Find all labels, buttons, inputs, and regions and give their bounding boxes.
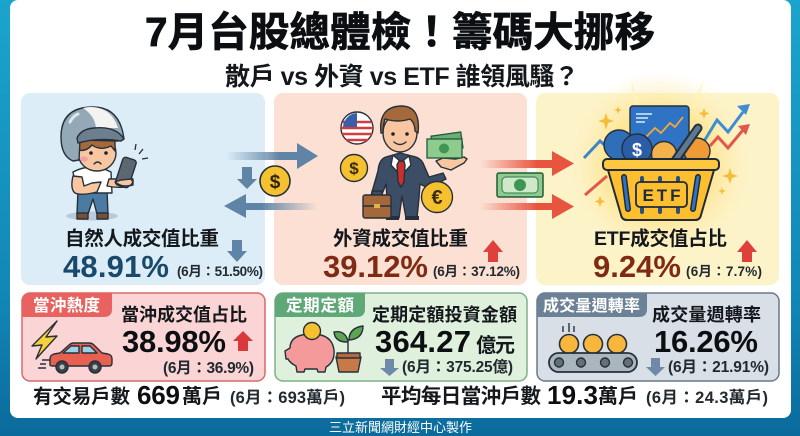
- unit: hundred million: 億元: [476, 334, 515, 357]
- arrow: foreign up: [483, 240, 503, 262]
- value: regular investment amount: 364.27: [375, 324, 471, 359]
- arrow: retail down: [227, 240, 247, 262]
- label: day trading share: 當沖成交值占比: [121, 304, 247, 325]
- panel: day trading: [22, 293, 265, 381]
- arrow: foreign to retail: [224, 194, 317, 218]
- arrow: regular investment down: [380, 359, 399, 376]
- tab: turnover: 成交量週轉率: [543, 296, 640, 315]
- panel: foreign investors: [274, 93, 527, 285]
- stat: trading accounts: 有交易戶數: [33, 385, 130, 408]
- icon: dollar coin: $: [349, 159, 359, 178]
- arrow: foreign to ETF upper: [480, 151, 574, 176]
- previous month: turnover: (6月：21.91%): [668, 359, 769, 376]
- panel: retail investors: [21, 93, 265, 285]
- arrow: ETF up: [737, 240, 757, 262]
- arrow: turnover down: [646, 358, 665, 376]
- label: ETF share: ETF成交值占比: [594, 227, 727, 250]
- arrow: foreign to ETF lower: [480, 194, 574, 219]
- value: foreign share: 39.12%: [323, 249, 428, 284]
- icon: piggy bank and plant: [285, 322, 363, 372]
- previous month: ETF: (6月：7.7%): [686, 264, 762, 279]
- label: turnover rate: 成交量週轉率: [652, 304, 761, 325]
- icon label: ETF: ETF: [642, 186, 680, 205]
- stat: average daily day-trading accounts: 19.3: [547, 380, 598, 410]
- tab: day trading heat: [22, 293, 112, 317]
- icon: dollar coin between panels: $: [270, 172, 281, 193]
- icon: US flag coin: [341, 112, 373, 144]
- stat: average daily day-trading accounts: 萬戶: [598, 385, 638, 408]
- icon: lightning and car: [32, 321, 112, 373]
- stat: trading accounts: [33, 380, 345, 410]
- icon: ETF basket: $: [632, 140, 642, 160]
- icon: euro coin: €: [431, 187, 443, 209]
- title: 7月台股總體檢！籌碼大挪移: [145, 9, 655, 55]
- arrow: retail to foreign: [226, 143, 318, 169]
- label: foreign share: 外資成交值比重: [333, 227, 468, 250]
- tab: day trading heat: 當沖熱度: [33, 296, 100, 315]
- panel: turnover: [537, 293, 779, 381]
- icon: briefcase: [363, 191, 391, 218]
- label: regular investment amount: 定期定額投資金額: [372, 304, 517, 325]
- previous month: regular investment: (6月：375.25億): [402, 358, 513, 376]
- previous month: foreign: (6月：37.12%): [433, 264, 520, 279]
- value: day trading share: 38.98%: [122, 324, 226, 359]
- previous month: retail: (6月：51.50%): [177, 264, 263, 279]
- stat: trading accounts: 669: [137, 380, 180, 410]
- arrow: small down: [237, 167, 257, 189]
- tab: regular investment: [275, 293, 365, 317]
- subtitle: 散戶 vs 外資 vs ETF 誰領風騷？: [225, 63, 579, 91]
- icon: worried rider with phone: [61, 107, 148, 220]
- icon: banknotes: [427, 132, 467, 170]
- icon: banknote between panels: [497, 173, 543, 197]
- footer credit: 三立新聞網財經中心製作: [329, 420, 472, 435]
- panel: regular investment: [275, 293, 527, 381]
- stat: trading accounts: (6月：693萬戶): [230, 388, 345, 407]
- stat: average daily day-trading accounts: (6月：24.3萬戶): [646, 388, 768, 407]
- panel: ETF: [536, 70, 779, 285]
- value: retail share: 48.91%: [63, 249, 169, 284]
- icon: businessman with currencies: [340, 106, 467, 220]
- icon: conveyor with coins: [549, 323, 637, 372]
- stat: average daily day-trading accounts: [381, 380, 768, 410]
- tab: regular investment: 定期定額: [286, 295, 354, 315]
- tab: turnover: [537, 293, 647, 317]
- label: retail share: 自然人成交值比重: [65, 227, 219, 250]
- stat: average daily day-trading accounts: 平均每日當沖戶數: [381, 385, 542, 408]
- value: turnover rate: 16.26%: [654, 324, 758, 359]
- icon: ETF basket: [565, 70, 755, 260]
- previous month: day trading: (6月：36.9%): [163, 360, 254, 377]
- stat: trading accounts: 萬戶: [182, 385, 222, 408]
- value: ETF share: 9.24%: [593, 249, 681, 284]
- arrow: day trading up: [233, 331, 253, 351]
- icon: dollar coin between panels: [260, 166, 290, 196]
